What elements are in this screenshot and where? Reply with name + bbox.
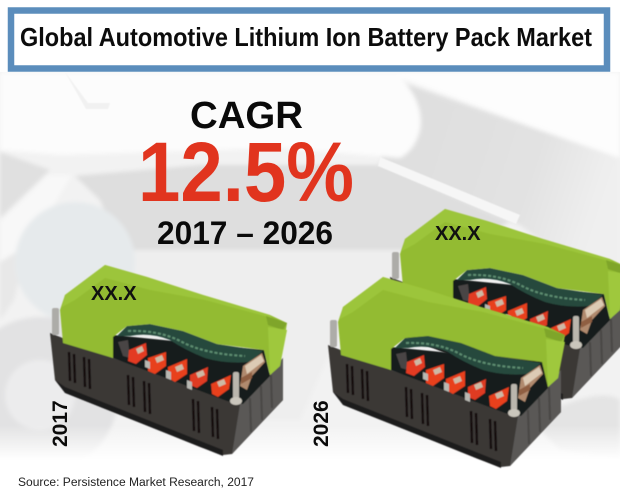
CAGR label: CAGR — [190, 95, 303, 137]
source note: Source: Persistence Market Research, 2017 — [18, 477, 254, 489]
year label 2017: 2017 — [49, 400, 72, 447]
value label 2017: XX.X — [91, 283, 137, 305]
battery: 2026 front — [328, 277, 565, 468]
year label 2026: 2026 — [310, 400, 333, 447]
title panel — [11, 10, 607, 68]
forecast period: 2017 – 2026 — [157, 215, 333, 251]
CAGR value: 12.5% — [138, 125, 354, 219]
battery: 2017 — [50, 265, 287, 456]
value label 2026: XX.X — [435, 223, 481, 245]
battery: 2026 rear — [390, 209, 620, 400]
